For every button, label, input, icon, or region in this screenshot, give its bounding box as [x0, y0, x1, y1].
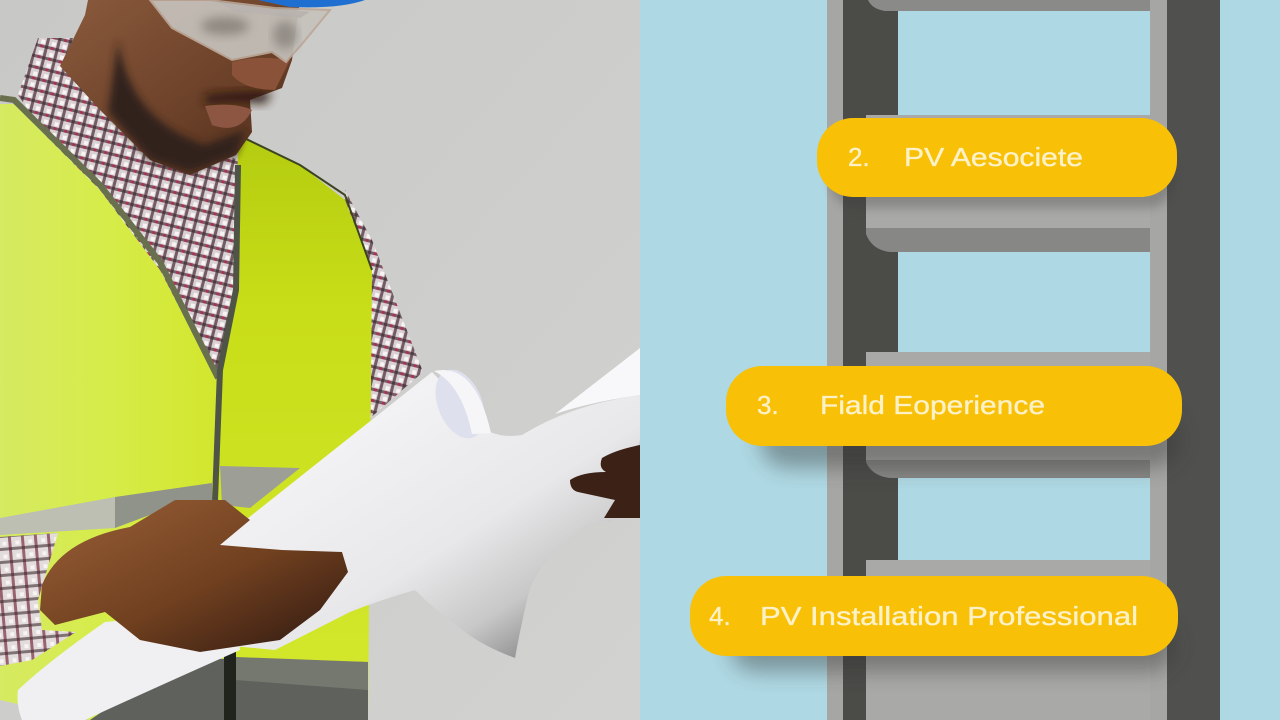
step 2 pill: PV Aesociete — [904, 142, 1083, 172]
ladder rung 4 — [866, 560, 1150, 720]
hard hat — [215, 0, 365, 18]
ladder left rail — [827, 0, 898, 720]
step 2 pill: 2. — [848, 142, 870, 172]
blueprint paper — [170, 348, 640, 658]
ladder right rail — [1150, 0, 1220, 720]
step 4 pill: PV Installation Professional — [760, 601, 1138, 631]
left hand — [40, 500, 348, 652]
shirt — [18, 38, 423, 420]
step 3 pill: 3. — [757, 390, 779, 420]
panel: photo of engineer with blueprint — [0, 0, 640, 720]
left shirt sleeve — [0, 533, 76, 666]
ladder rung 1 — [868, 0, 1150, 11]
step 4 pill: 4. — [709, 601, 731, 631]
step 3 pill: Fiald Eoperience — [820, 390, 1045, 420]
panel: career ladder on blue background — [640, 0, 1280, 720]
step 4 pill — [690, 576, 1178, 672]
reflective vest — [0, 98, 372, 720]
ladder rung 3 — [866, 352, 1150, 478]
ladder rung 2 — [866, 115, 1150, 252]
step 3 pill — [726, 366, 1182, 468]
lower blueprint tube — [18, 610, 240, 720]
head and face — [60, 0, 300, 175]
right hand — [570, 445, 640, 518]
safety goggles — [150, 0, 330, 62]
step 2 pill — [817, 118, 1177, 208]
